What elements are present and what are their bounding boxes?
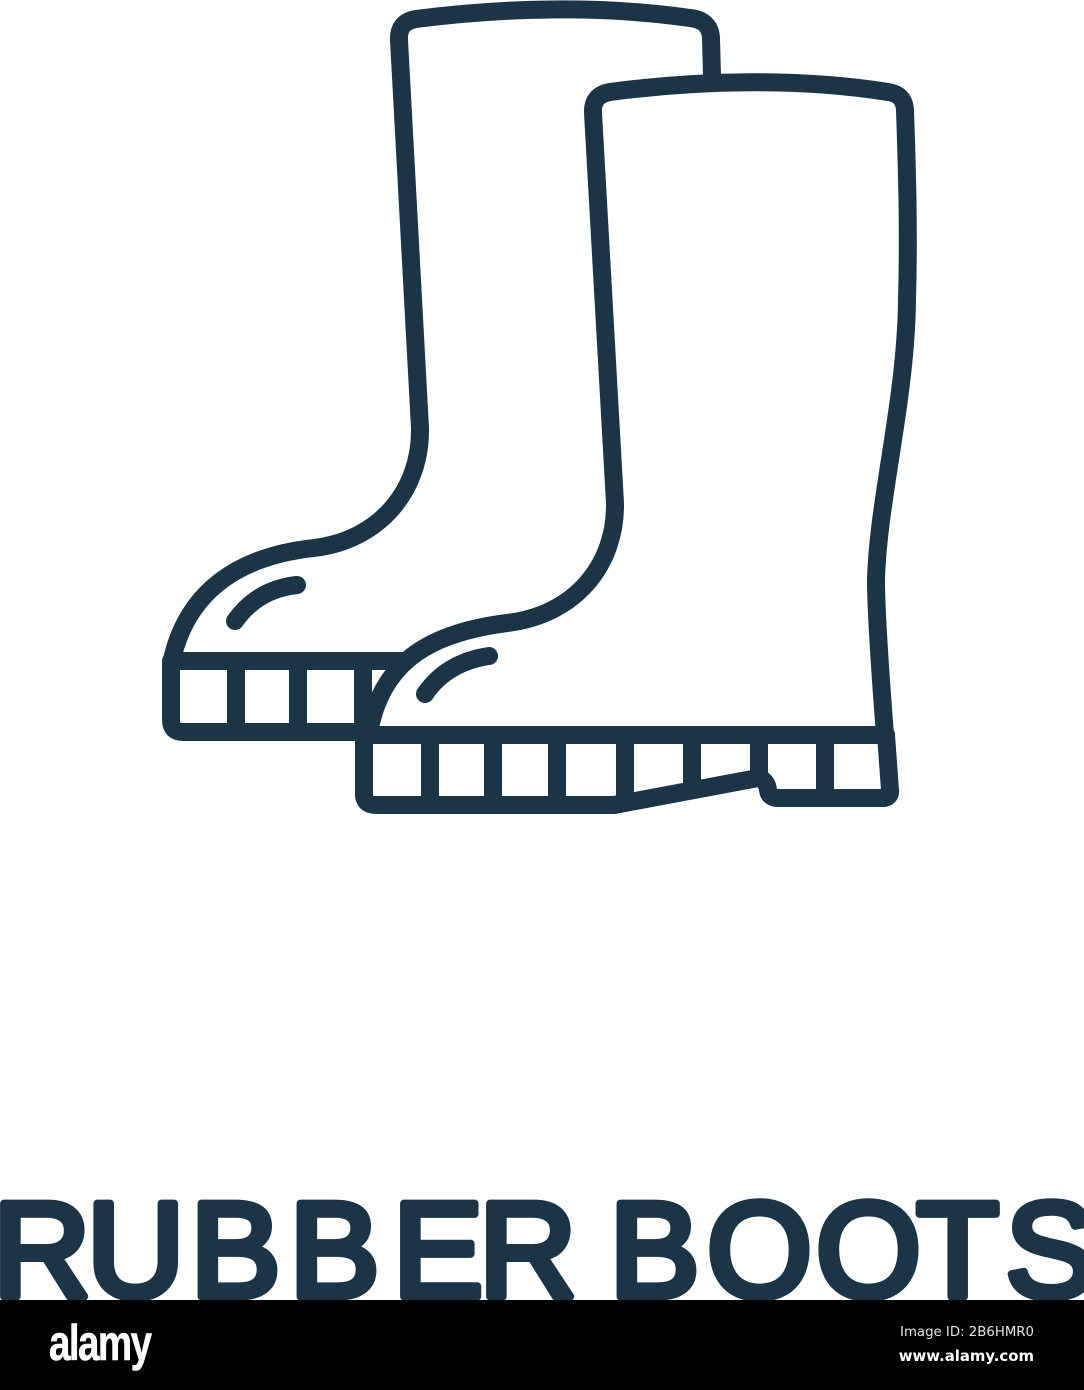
website url: www.alamy.com	[899, 1347, 1034, 1365]
back boot	[171, 9, 712, 732]
image id: Image ID: 2B6HMR0	[900, 1325, 1034, 1340]
front boot	[364, 82, 908, 805]
footer bar	[0, 1300, 1084, 1390]
icon: rubber boots	[162, 0, 917, 814]
footer logo: alamy	[49, 1315, 150, 1371]
